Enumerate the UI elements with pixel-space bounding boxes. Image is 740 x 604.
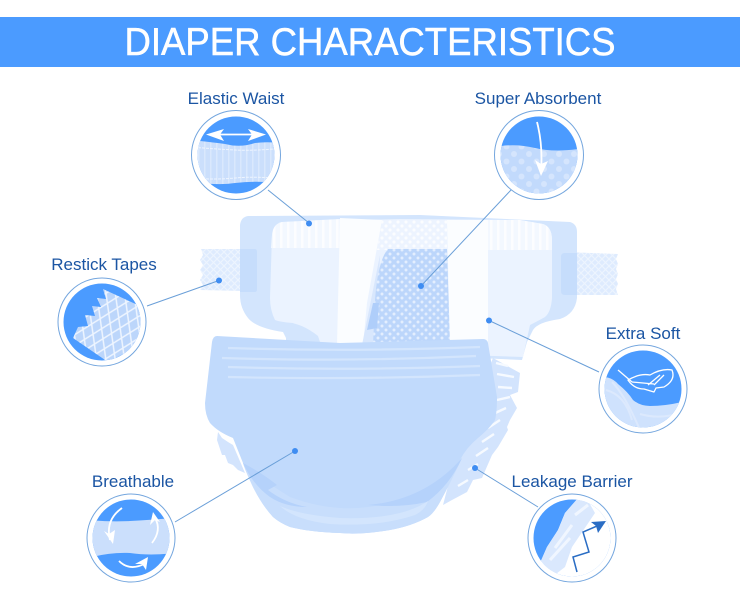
callout: Restick Tapes [51,255,222,366]
core shadow [367,303,379,330]
callout: Leakage Barrier: Leakage Barrier [512,472,633,491]
callout: Extra Soft [486,318,687,433]
left ruffle [217,432,245,473]
icon: downward arrow [535,122,548,176]
front panel [205,336,497,534]
bottom highlight [280,501,428,525]
icon: blocked leak arrow [573,521,606,572]
right ruffle [443,358,520,505]
callout: Breathable [87,448,298,582]
callout: Restick Tapes: Restick Tapes [51,255,157,274]
icon: stretch arrow [206,129,266,141]
waist stripes right [488,220,552,250]
callout: Leakage Barrier [472,465,633,590]
title banner: DIAPER CHARACTERISTICS [124,21,616,64]
absorbent core [373,249,450,345]
title banner [0,17,740,67]
icon: circulation arrows [104,508,160,570]
left tape tab [240,249,257,292]
white centre strips [337,218,382,345]
right crescent [368,458,462,506]
core side strip [362,255,380,345]
callout: Super Absorbent: Super Absorbent [475,89,602,108]
right restick tape [565,252,618,295]
icon: feather [618,370,673,392]
callout: Elastic Waist [188,89,312,226]
callout: Elastic Waist: Elastic Waist [188,89,285,108]
front body [205,336,497,534]
callout: Breathable: Breathable [92,472,174,491]
front waist lines [222,347,480,378]
diaper illustration [200,215,618,534]
leg fold left [286,323,320,345]
lower band [243,458,462,534]
callout: Super Absorbent [418,89,602,289]
waist stripes left [271,219,340,248]
top centre mesh [377,220,447,250]
right tape tab [561,253,577,295]
back panel [240,215,577,360]
inner liner [270,219,552,357]
callout: Extra Soft: Extra Soft [606,324,681,343]
left restick tape [200,249,245,291]
left crescent [243,463,307,507]
